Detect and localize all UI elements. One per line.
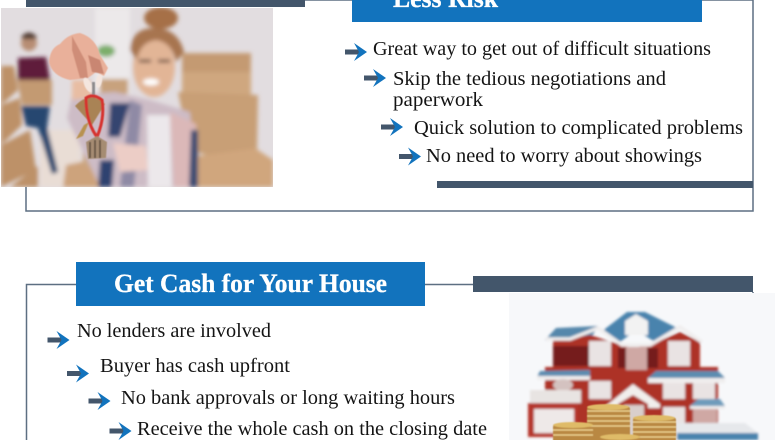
arrow icon <box>110 422 132 440</box>
hand and keys <box>49 33 108 159</box>
arrow icon <box>88 392 110 410</box>
plaid shirt <box>67 92 198 187</box>
arrow icon <box>67 364 89 382</box>
panel frame: get cash <box>26 284 753 440</box>
header: less risk <box>352 0 702 22</box>
face and hair <box>133 37 175 97</box>
bullet text: Quick solution to complicated problems <box>414 117 743 139</box>
bullet text: Receive the whole cash on the closing date <box>137 418 487 440</box>
stacked boxes, left <box>1 66 38 187</box>
bullet text: Buyer has cash upfront <box>100 355 290 377</box>
photo: woman holding keys <box>1 7 273 187</box>
coin stacks <box>553 404 676 440</box>
photo: model house and coins <box>525 293 761 440</box>
header: get cash <box>76 262 425 306</box>
arrow icon <box>399 148 421 166</box>
top dark bar <box>26 0 305 7</box>
panel frame: less risk <box>26 0 753 211</box>
panel: get cash <box>26 262 775 440</box>
lower right dark bar <box>437 181 753 188</box>
bullet text: No bank approvals or long waiting hours <box>121 387 455 409</box>
header: get cash: Get Cash for Your House <box>114 269 387 298</box>
dark bar <box>473 276 753 292</box>
bullet text: Skip the tedious negotiations and <box>393 68 666 90</box>
arrow icon <box>381 118 403 136</box>
bullet list: less risk <box>345 38 743 167</box>
arrow icon <box>345 43 367 61</box>
bullet text: Great way to get out of difficult situations <box>373 38 711 60</box>
bullet text continued: paperwork <box>393 89 483 111</box>
bullet list: get cash <box>48 320 487 440</box>
arrow icon <box>364 69 386 87</box>
arrow icon <box>48 331 70 349</box>
bullet text: No need to worry about showings <box>426 145 702 167</box>
stacked boxes, right <box>179 62 254 98</box>
panel: less risk <box>1 0 753 211</box>
bullet text: No lenders are involved <box>77 320 271 342</box>
